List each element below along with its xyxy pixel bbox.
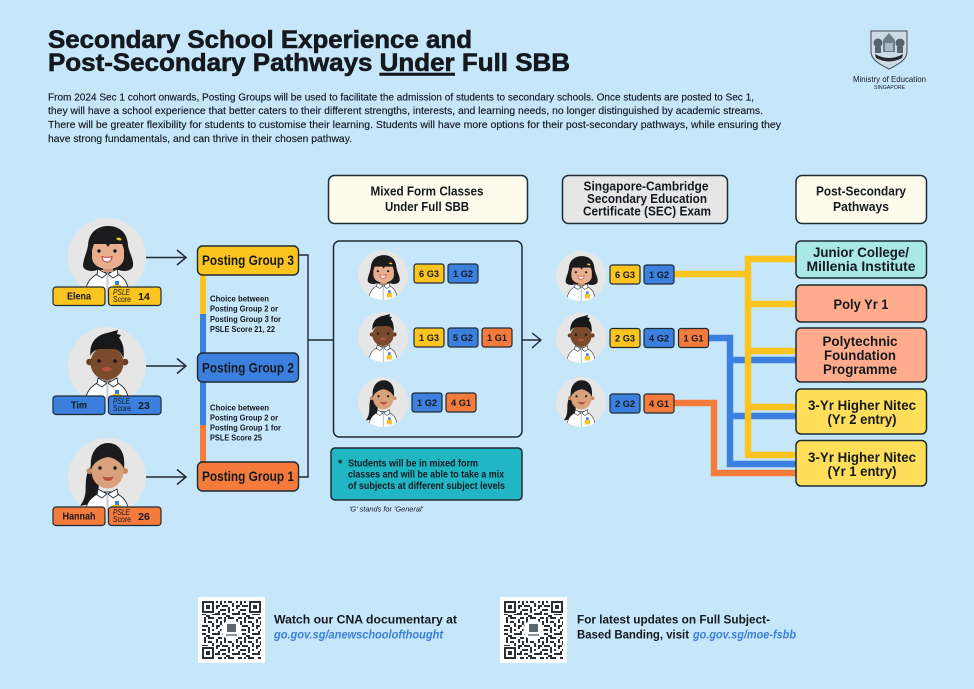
student: Hannah: Score [113, 515, 131, 524]
pathway: poly year 1: Poly Yr 1 [834, 297, 889, 312]
link text: latest updates: Based Banding, visit [577, 628, 689, 642]
student: Tim: PSLE [113, 397, 131, 406]
student: Hannah [53, 438, 161, 526]
callout: mixed form classes note: classes and will be able to take a mix [348, 470, 504, 480]
class row: Hannah [358, 377, 476, 428]
student: Tim: Tim [71, 400, 87, 412]
pathway: junior college [796, 241, 926, 278]
pathway: junior college: Junior College/ [813, 245, 909, 260]
callout: mixed form classes note: Students will be in mixed form [348, 458, 478, 470]
logo: Ministry of Education [853, 31, 926, 91]
posting group 2 [198, 353, 298, 382]
intro paragraph: From 2024 Sec 1 cohort onwards, Posting Groups will be used to facilitate the admission of students to secondary schools. Once students are posted to Sec 1, [48, 92, 754, 104]
pathway: junior college: Millenia Institute [806, 259, 916, 274]
intro paragraph: There will be greater flexibility for students to customise their learning. Students will have more options for their post-secondary pathways, while ensuring they [48, 119, 782, 131]
class row: Tim: 1 G1 [487, 333, 508, 344]
class row: Hannah: 4 G1 [451, 398, 472, 409]
heading: post-secondary pathways [796, 176, 926, 224]
posting group 1 [198, 462, 298, 491]
link text: CNA documentary: go.gov.sg/anewschoolofthought [273, 628, 444, 642]
class row: Elena: 6 G3 [419, 269, 439, 280]
intro paragraph: they will have a school experience that better caters to their different strengths, interests, and learning needs, no longer distinguished by academic streams. [48, 105, 763, 117]
choice note: groups 2 and 3: Posting Group 3 for [210, 315, 281, 324]
footnote: 'G' stands for 'General' [349, 504, 424, 514]
heading: mixed form classes [328, 176, 528, 224]
class row: Elena: 1 G2 [453, 269, 473, 280]
pathway: polytechnic foundation programme: Programme [823, 362, 897, 377]
choice note: groups 2 and 1: PSLE Score 25 [210, 434, 262, 442]
callout: mixed form classes note: * [338, 458, 343, 470]
student: Hannah: Hannah [62, 512, 96, 522]
pathway: poly year 1 [796, 285, 926, 322]
student: Elena: 14 [138, 291, 150, 303]
arrows: students to posting groups [146, 250, 186, 484]
student: Tim: 23 [138, 400, 150, 412]
link text: latest updates [577, 612, 796, 642]
orange pathway [674, 403, 796, 473]
blue pathway [708, 338, 796, 464]
choice note: groups 2 and 3: Posting Group 2 or [210, 304, 278, 314]
SEC row: Elena [556, 251, 674, 302]
choice note: groups 2 and 3: Choice between [210, 294, 269, 304]
logo: Ministry of Education: SINGAPORE [874, 85, 905, 91]
pathway: polytechnic foundation programme [796, 328, 926, 382]
choice note: groups 2 and 1: Posting Group 2 or [210, 414, 278, 422]
class row: Tim: 1 G3 [419, 333, 439, 344]
choice note: groups 2 and 3 [210, 294, 281, 334]
choice bars between posting groups [200, 274, 206, 463]
student: Elena: PSLE [113, 288, 131, 297]
student: Elena [53, 218, 161, 306]
panel: mixed form classes [334, 241, 522, 437]
student: Tim [53, 327, 161, 414]
logo: Ministry of Education: Ministry of Education [853, 74, 926, 84]
pathway: polytechnic foundation programme: Polytechnic [822, 334, 898, 349]
posting group 3: Posting Group 3 [202, 253, 294, 268]
connector: posting groups to mixed form classes [298, 255, 333, 477]
link text: CNA documentary: Watch our CNA documentary at [274, 612, 457, 626]
pathway: higher nitec year 1 [796, 440, 926, 486]
QR code: CNA documentary [198, 597, 265, 663]
pathway: higher nitec year 1: 3-Yr Higher Nitec [808, 450, 916, 465]
SEC row: Tim [556, 313, 708, 364]
pathway: higher nitec year 2 [796, 389, 926, 434]
heading: post-secondary pathways: Pathways [833, 200, 889, 214]
intro paragraph [48, 92, 782, 145]
link text: latest updates: go.gov.sg/moe-fsbb [692, 628, 796, 642]
pathway: higher nitec year 2: (Yr 2 entry) [828, 412, 896, 427]
student: Elena: Elena [67, 292, 91, 302]
heading: mixed form classes: Under Full SBB [385, 200, 469, 214]
student: Hannah: 26 [138, 511, 150, 523]
pathway: higher nitec year 2: 3-Yr Higher Nitec [808, 398, 916, 413]
arrow: classes to SEC exam [522, 333, 541, 348]
callout: mixed form classes note: of subjects at different subject levels [348, 481, 505, 492]
callout: mixed form classes note [331, 448, 522, 500]
posting group 2: Posting Group 2 [202, 360, 294, 376]
class row: Elena [358, 250, 478, 301]
choice note: groups 2 and 1: Posting Group 1 for [210, 424, 281, 432]
choice note: groups 2 and 1 [210, 404, 281, 442]
student: Elena: Score [113, 295, 131, 304]
class row: Tim: 5 G2 [453, 333, 473, 344]
choice note: groups 2 and 3: PSLE Score 21, 22 [210, 325, 276, 334]
SEC row: Hannah: 4 G1 [649, 399, 670, 410]
student: Hannah: PSLE [113, 508, 131, 517]
title: Secondary School Experience and [48, 26, 472, 54]
link text: latest updates: For latest updates on Full Subject- [577, 612, 770, 626]
heading: SEC exam: Secondary Education [587, 192, 707, 206]
pathway: higher nitec year 1: (Yr 1 entry) [828, 464, 896, 479]
posting group 1: Posting Group 1 [202, 469, 294, 484]
class row: Hannah: 1 G2 [417, 398, 437, 409]
class row: Tim [358, 312, 512, 363]
SEC row: Tim: 1 G1 [684, 334, 704, 344]
SEC row: Elena: 1 G2 [649, 270, 669, 281]
heading: SEC exam: Certificate (SEC) Exam [583, 204, 711, 218]
student: Tim: Score [113, 404, 131, 413]
title: Post-Secondary Pathways Under Full SBB [48, 49, 570, 77]
QR code: latest updates [500, 597, 567, 663]
choice note: groups 2 and 1: Choice between [210, 404, 269, 412]
SEC row: Elena: 6 G3 [615, 270, 635, 281]
link text: CNA documentary [273, 612, 457, 642]
pathway: polytechnic foundation programme: Foundation [824, 348, 896, 363]
posting group 3 [198, 246, 298, 275]
heading: SEC exam [562, 176, 728, 224]
intro paragraph: have strong fundamentals, and can thrive in their chosen pathway. [48, 133, 352, 145]
heading: SEC exam: Singapore-Cambridge [584, 180, 709, 194]
heading: post-secondary pathways: Post-Secondary [816, 184, 906, 198]
yellow pathway [674, 259, 796, 455]
SEC row: Hannah: 2 G2 [615, 399, 635, 410]
SEC row: Tim: 4 G2 [649, 334, 669, 344]
SEC row: Hannah [556, 377, 674, 428]
SEC row: Tim: 2 G3 [615, 334, 635, 344]
title [48, 26, 570, 77]
heading: mixed form classes: Mixed Form Classes [370, 184, 484, 198]
pathway lines [674, 259, 796, 473]
